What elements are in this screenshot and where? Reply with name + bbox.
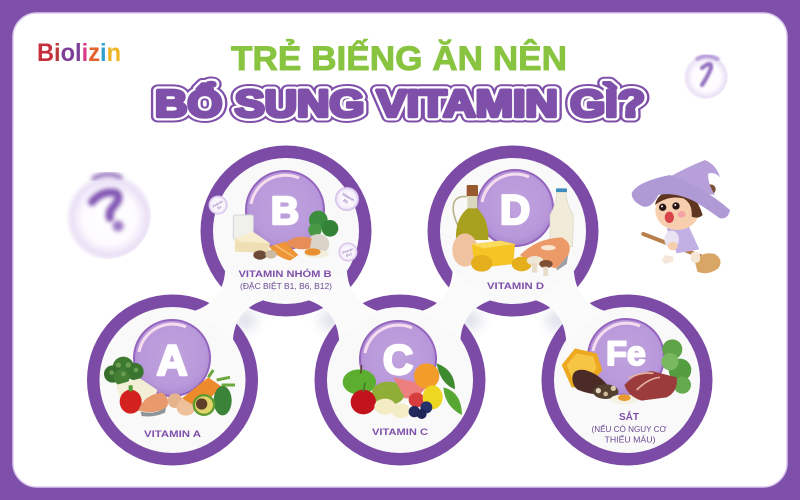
mini bubble: vitamin B12 (338, 242, 358, 262)
connected ring network (87, 146, 712, 466)
title: line two: BỔ SUNG VITAMIN GÌ? (155, 80, 645, 126)
mascot: witch on broom (632, 160, 730, 273)
label: iron: SẮT (619, 410, 639, 423)
panel: vitamin A (104, 320, 235, 440)
sublabel: vitamin B: (ĐẶC BIỆT B1, B6, B12) (240, 281, 332, 291)
label: vitamin C: VITAMIN C (372, 427, 428, 438)
orb: B: B (271, 190, 299, 233)
title: line two: BỔ SUNG VITAMIN GÌ? (155, 80, 645, 126)
mini bubble: vitamin B1: B1 (217, 205, 222, 210)
panel: vitamin C (343, 321, 462, 438)
foods: C (343, 363, 462, 419)
sublabel: iron: (NẾU CÓ NGUY CƠ (592, 424, 666, 434)
label: vitamin A: VITAMIN A (144, 429, 201, 440)
sublabel: iron (592, 424, 666, 444)
foods: D (452, 185, 573, 276)
foods: A (104, 357, 235, 417)
mini bubble: vitamin B1 (208, 196, 228, 214)
orb: A: A (156, 337, 188, 385)
foods: B (233, 211, 338, 261)
sublabel: iron: THIẾU MÁU) (604, 434, 656, 444)
title: line two: BỔ SUNG VITAMIN GÌ? (155, 80, 645, 126)
panel: iron (562, 319, 691, 444)
question bubble: small (682, 53, 728, 99)
mini bubble: vitamin B12: B12 (345, 252, 353, 258)
label: vitamin B: VITAMIN NHÓM B (238, 268, 332, 280)
mini bubble: vitamin B6: Vitamin (341, 191, 355, 202)
orb: D: D (500, 186, 530, 233)
question bubble: large (63, 171, 151, 259)
orb: C: C (383, 336, 413, 383)
orb: B (246, 171, 324, 249)
title: line one: TRẺ BIẾNG ĂN NÊN (231, 38, 567, 78)
logo: Biolizin: Biolizin (37, 39, 121, 67)
label: vitamin D: VITAMIN D (487, 281, 544, 292)
mini bubble: vitamin B1: Vitamin (211, 199, 224, 209)
mini bubble: vitamin B6 (335, 187, 359, 211)
mini bubble: vitamin B6: B6 (342, 198, 350, 205)
panel: vitamin D (452, 170, 573, 292)
panel: vitamin B (208, 171, 359, 291)
foods: iron (562, 339, 691, 404)
soft shadows (234, 310, 568, 330)
mini bubble: vitamin B12: Vitamin (342, 247, 354, 255)
orb: Fe: Fe (606, 335, 646, 373)
